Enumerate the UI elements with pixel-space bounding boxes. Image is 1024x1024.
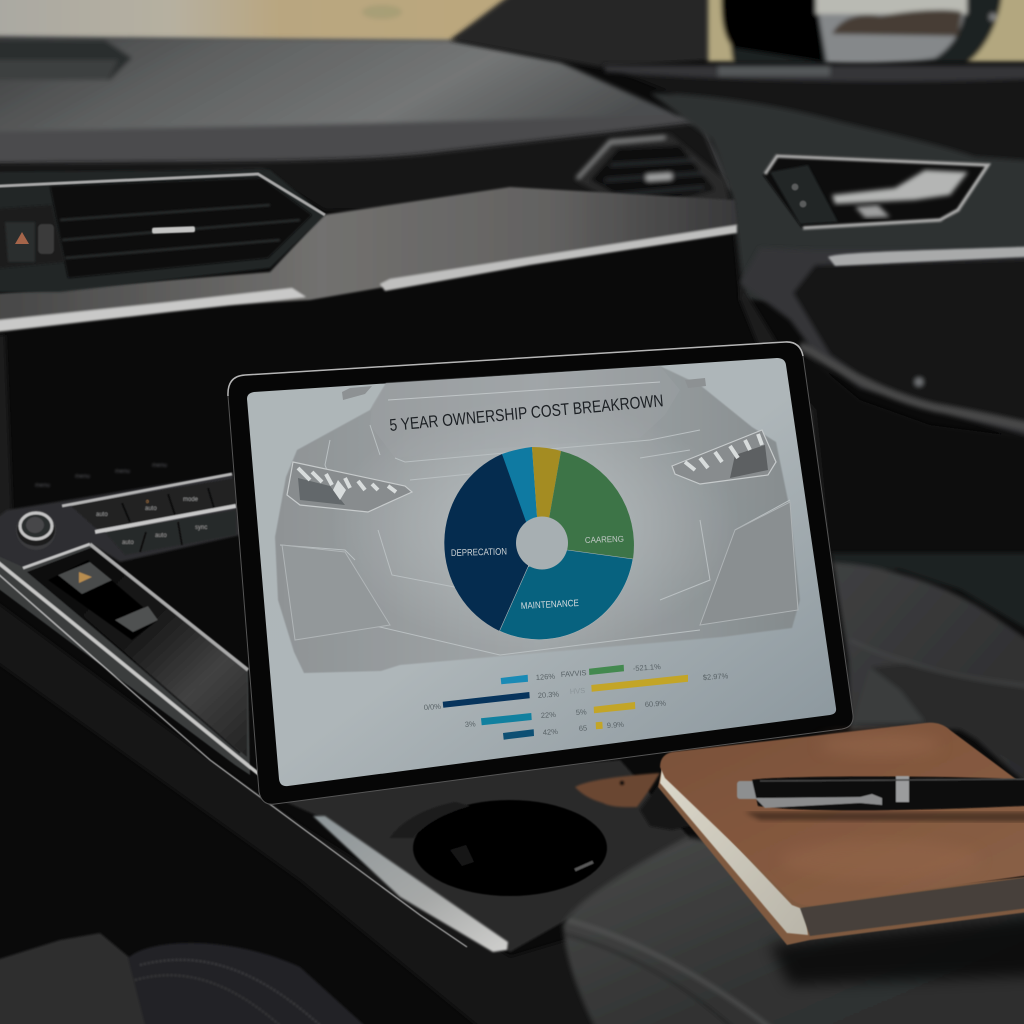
left door column sliver — [0, 335, 12, 530]
bar labels: 126% — [536, 672, 556, 682]
bars — [443, 665, 688, 740]
label: depreciation: DEPRECATION — [451, 547, 507, 559]
door panel — [600, 64, 1024, 300]
console top plate — [0, 473, 240, 570]
rotary knob — [16, 510, 56, 550]
left headlight — [287, 462, 412, 512]
climate buttons: auto — [122, 540, 134, 546]
pen — [737, 776, 1024, 822]
bar labels: FAVVIS — [561, 668, 587, 679]
bar labels: 0/0% — [424, 702, 442, 712]
slice: green — [547, 451, 634, 559]
notebook pages — [660, 768, 808, 935]
door handle — [763, 154, 988, 228]
faint upper button labels: menu — [152, 463, 167, 469]
dark band below dash — [0, 122, 735, 210]
bezel highlight — [228, 342, 803, 396]
faint upper button labels: menu — [75, 474, 90, 480]
faint upper button labels — [35, 463, 167, 489]
chrome console strip — [313, 816, 508, 952]
faint upper button labels: menu — [35, 483, 50, 489]
center air vent — [575, 134, 730, 215]
A pillar — [450, 0, 718, 68]
donut chart — [444, 447, 634, 640]
tablet — [228, 342, 853, 804]
armrest — [563, 837, 1024, 1024]
slice: maintenance — [500, 549, 633, 640]
left air vent — [0, 170, 325, 292]
notebook cover — [660, 723, 1024, 905]
upper dashboard — [0, 36, 735, 190]
bar labels: 20.3% — [538, 690, 560, 700]
label: financing: CAARENG — [585, 534, 624, 545]
silver lower dash trim — [0, 187, 738, 334]
climate buttons: sync — [195, 525, 207, 531]
side mirrors on drawing — [342, 386, 372, 400]
bar labels: 9.9% — [607, 720, 625, 730]
bar labels: 5% — [576, 707, 587, 717]
bottom left seat — [0, 933, 385, 1024]
bar labels: 22% — [541, 710, 556, 720]
bar labels: -521.1% — [633, 662, 661, 673]
climate buttons: o — [146, 499, 149, 505]
climate buttons: mode — [183, 497, 199, 503]
right headlight — [672, 430, 776, 484]
windshield view — [0, 0, 525, 42]
slice: yellow — [532, 447, 561, 530]
side air intakes — [282, 545, 390, 640]
door chrome strip — [828, 246, 1024, 266]
faint upper button labels: menu — [115, 469, 130, 475]
hazard switch — [48, 560, 158, 640]
lower console side — [0, 590, 603, 1024]
car line drawing — [275, 366, 800, 673]
bar labels: 42% — [543, 727, 558, 737]
cup holder — [390, 800, 607, 896]
notebook — [658, 723, 1024, 985]
speckled black storage — [133, 540, 240, 647]
bar labels: HVS — [570, 686, 586, 696]
slice: blue small — [502, 447, 538, 533]
tablet screen — [247, 358, 836, 786]
tray plate — [258, 760, 690, 952]
bar labels — [424, 662, 729, 737]
bar labels: 65 — [579, 723, 587, 733]
notebook side — [800, 875, 1024, 936]
bar chart — [424, 662, 729, 740]
climate buttons: auto — [96, 512, 108, 518]
side mirror — [708, 0, 1024, 64]
lower center console — [0, 463, 690, 1024]
chart title: 5 YEAR OWNERSHIP COST BREAKROWN — [389, 391, 664, 435]
notebook shadow — [770, 915, 1024, 985]
climate buttons: auto — [145, 506, 157, 512]
label: maintenance: MAINTENANCE — [521, 598, 579, 612]
bar labels: $2.97% — [703, 671, 729, 682]
glossy console strip — [0, 544, 467, 947]
notebook spine leather — [658, 768, 1024, 945]
climate buttons: auto — [155, 533, 167, 539]
right seat — [830, 553, 1024, 800]
door pocket — [740, 248, 1024, 570]
climate buttons — [62, 474, 236, 555]
tablet bezel — [228, 342, 853, 804]
donut hole — [516, 516, 568, 570]
bar labels: 3% — [465, 719, 476, 729]
hazard button cluster — [0, 205, 65, 270]
leather key fob — [575, 773, 695, 830]
slice: depreciation — [444, 454, 530, 631]
bar labels: 60.9% — [645, 699, 667, 709]
